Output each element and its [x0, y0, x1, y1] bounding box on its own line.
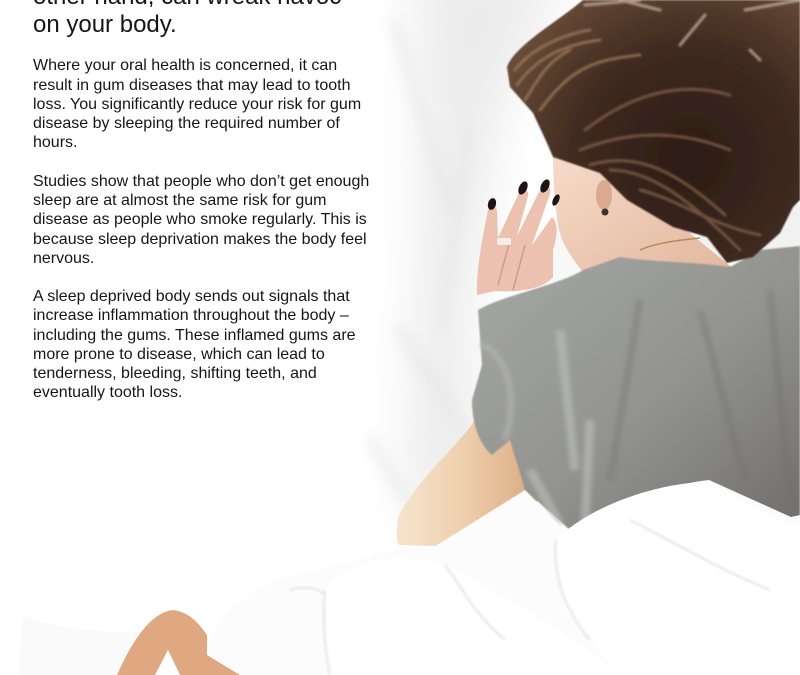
text block: paragraph 1: loss. You significantly reduce your risk for gum: [33, 96, 361, 113]
text block: paragraph 2: [33, 173, 369, 267]
nails: [487, 178, 561, 211]
neck and face: [553, 155, 735, 275]
text block: paragraph 3: increase inflammation throughout the body –: [33, 307, 349, 324]
ear and earring: [596, 180, 612, 216]
text block: paragraph 3: tenderness, bleeding, shifting teeth, and: [33, 365, 317, 382]
text block: paragraph 1: [33, 57, 361, 151]
hair: [507, 0, 800, 263]
heading: [33, 0, 341, 38]
text block: paragraph 1: hours.: [33, 134, 77, 151]
shirt folds: [480, 290, 790, 530]
text block: paragraph 1: result in gum diseases that may lead to tooth: [33, 77, 351, 94]
text block: paragraph 2: sleep are at almost the same risk for gum: [33, 192, 326, 209]
text block: paragraph 3: A sleep deprived body sends out signals that: [33, 288, 350, 305]
text block: paragraph 2: disease as people who smoke regularly. This is: [33, 211, 367, 228]
text block: paragraph 2: Studies show that people who don’t get enough: [33, 173, 369, 190]
hand with dark nails: [477, 178, 561, 295]
ring: [497, 238, 511, 245]
foreground: white duvet: [207, 480, 800, 675]
text block: paragraph 1: disease by sleeping the required number of: [33, 115, 340, 132]
text block: paragraph 2: nervous.: [33, 250, 94, 267]
grey t-shirt: [472, 246, 800, 530]
heading: on your body.: [33, 11, 177, 38]
pillow: [18, 615, 140, 675]
pillow beside the face: [545, 225, 590, 285]
text block: paragraph 3: eventually tooth loss.: [33, 384, 182, 401]
text block: paragraph 3: more prone to disease, which can lead to: [33, 346, 325, 363]
woman's arm: [397, 415, 540, 546]
text block: paragraph 3: [33, 288, 356, 401]
text block: paragraph 3: including the gums. These inflamed gums are: [33, 327, 356, 344]
text block: paragraph 1: Where your oral health is concerned, it can: [33, 57, 337, 74]
raised arm: [117, 610, 240, 675]
necklace: [640, 238, 700, 250]
photo: sleeping woman: [397, 0, 800, 546]
hair highlights: [515, 0, 800, 250]
text block: paragraph 2: because sleep deprivation makes the body feel: [33, 231, 367, 248]
